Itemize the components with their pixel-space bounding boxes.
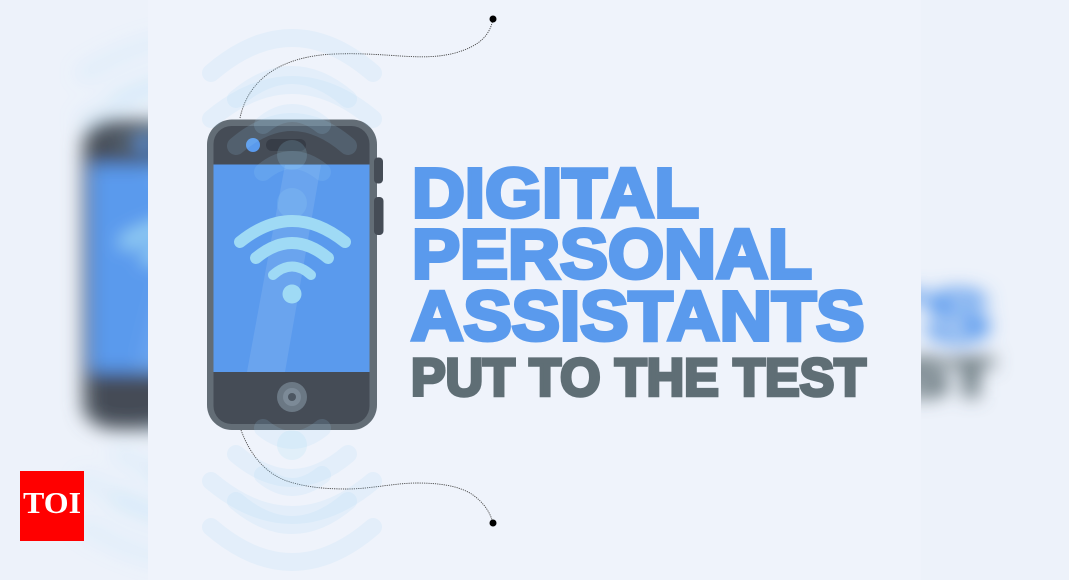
- subtitle: PUT TO THE TEST: [411, 348, 866, 408]
- icon: smartphone with wifi symbol: [207, 120, 384, 430]
- title: PERSONAL: [412, 215, 812, 293]
- logo: TOI: TOI: [23, 485, 81, 520]
- title: ASSISTANTS: [411, 277, 864, 355]
- connector: bottom dotted curve: [241, 430, 496, 526]
- blurred background copy of the artwork: [82, 38, 993, 562]
- blurred background copy of the artwork: ASSISTANTS: [364, 277, 991, 355]
- title: [411, 154, 864, 355]
- centre panel background: [148, 0, 921, 580]
- connector: top dotted curve: [240, 16, 496, 118]
- blurred background copy of the artwork: PUT TO THE TEST: [364, 347, 993, 407]
- logo: TOI: [20, 471, 84, 541]
- signal waves radiating from phone: [211, 38, 373, 562]
- title: DIGITAL: [412, 154, 699, 232]
